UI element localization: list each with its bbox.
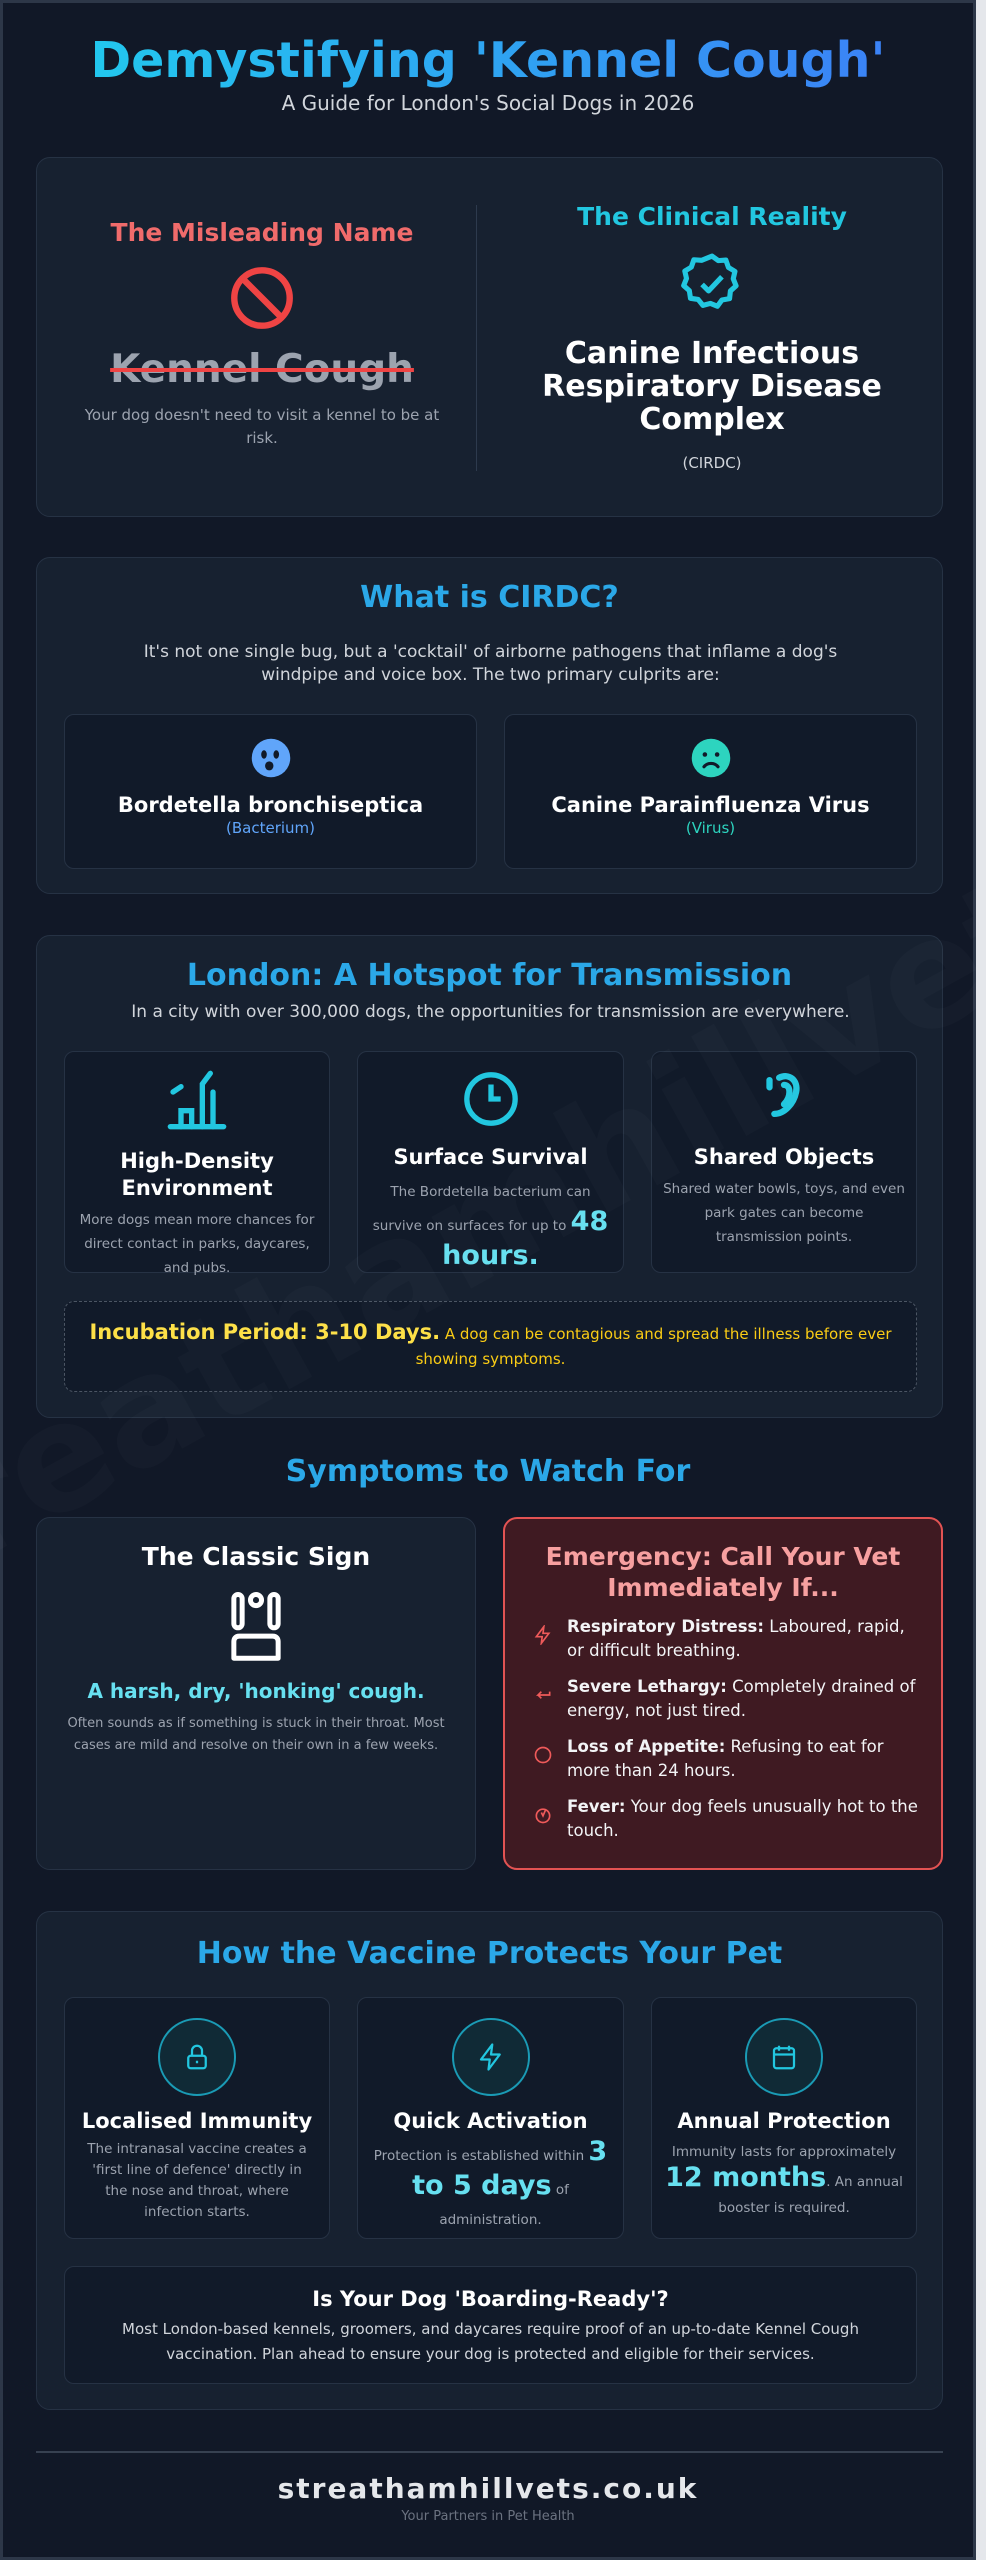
card: parainfluenza: [504, 714, 917, 869]
desc: Your dog doesn't need to visit a kennel to be at risk.: [85, 406, 439, 447]
title: [120, 1149, 274, 1200]
title: [546, 1542, 900, 1602]
icon: sad face: [692, 738, 730, 778]
title: Is Your Dog 'Boarding-Ready'?: [312, 2287, 669, 2311]
desc: The intranasal vaccine creates a 'first line of defence' directly in the nose and throat, where infection starts.: [87, 2141, 307, 2220]
type: (Bacterium): [226, 819, 315, 837]
text: Most London-based kennels, groomers, and daycares require proof of an up-to-date Kennel Cough vaccination. Plan ahead to ensure your dog is protected and eligible for their services.: [122, 2320, 859, 2363]
heading: misleading name: The Misleading Name: [111, 218, 413, 247]
panel: vaccine: [36, 1911, 943, 2410]
item: appetite: Loss of Appetite: Refusing to eat for more than 24 hours.: [567, 1737, 884, 1780]
title: Demystifying 'Kennel Cough': [90, 32, 886, 89]
card: surface survival: [357, 1051, 624, 1273]
desc: Immunity lasts for approximately 12 months. An annual booster is required.: [665, 2144, 903, 2216]
cyan highlight: A harsh, dry, 'honking' cough.: [87, 1679, 425, 1703]
desc: Often sounds as if something is stuck in their throat. Most cases are mild and resolve on their own in a few weeks.: [67, 1716, 445, 1753]
icon: face: [252, 738, 290, 778]
desc: Protection is established within 3 to 5 days of administration.: [374, 2136, 607, 2228]
desc: More dogs mean more chances for direct contact in parks, daycares, and pubs.: [80, 1212, 314, 1276]
card: annual protection: [651, 1997, 917, 2239]
card: localised immunity: [64, 1997, 330, 2239]
struck text: Kennel Cough: [110, 347, 414, 392]
item: respiratory: Respiratory Distress: Laboured, rapid, or difficult breathing.: [567, 1617, 905, 1660]
footer url: streathamhillvets.co.uk: [278, 2472, 698, 2505]
subtitle: A Guide for London's Social Dogs in 2026: [282, 91, 694, 115]
title: High-Density: [120, 1149, 274, 1173]
subtext: In a city with over 300,000 dogs, the opportunities for transmission are everywhere.: [131, 1002, 850, 1022]
panel: name vs reality: [36, 157, 943, 517]
icon: hand swirl: [766, 1073, 800, 1117]
title: Localised Immunity: [82, 2109, 312, 2133]
clinical reality column: [542, 202, 882, 472]
acronym: (CIRDC): [682, 454, 742, 472]
heading: What is CIRDC?: [360, 580, 619, 615]
icon: badge check: [681, 254, 739, 309]
icon: lock: [158, 2018, 236, 2096]
type: (Virus): [686, 819, 735, 837]
title: Emergency: Call Your Vet: [546, 1542, 900, 1571]
footer tagline: Your Partners in Pet Health: [401, 2509, 575, 2524]
heading: London: A Hotspot for Transmission: [187, 958, 792, 993]
card: quick activation: [357, 1997, 624, 2239]
item: lethargy: Severe Lethargy: Completely drained of energy, not just tired.: [567, 1677, 915, 1720]
title: Quick Activation: [393, 2109, 588, 2133]
desc: Shared water bowls, toys, and even park gates can become transmission points.: [663, 1181, 905, 1245]
icon: bolt: [452, 2018, 530, 2096]
icon: calendar: [745, 2018, 823, 2096]
panel: classic sign: [36, 1517, 476, 1870]
item: fever: Fever: Your dog feels unusually hot to the touch.: [567, 1797, 918, 1840]
name: Bordetella bronchiseptica: [118, 793, 423, 817]
title: The Classic Sign: [142, 1542, 370, 1571]
card: density: [64, 1051, 330, 1273]
title: Shared Objects: [694, 1145, 874, 1169]
icon: dog/cough: [231, 1592, 281, 1661]
panel: what is CIRDC: [36, 557, 943, 894]
panel: London hotspot: [36, 935, 943, 1418]
icon: clock: [464, 1072, 518, 1126]
title: Environment: [121, 1176, 273, 1200]
heading: How the Vaccine Protects Your Pet: [197, 1936, 782, 1971]
card: bordetella: [64, 714, 477, 869]
icon: buildings: [168, 1070, 226, 1130]
title: Surface Survival: [393, 1145, 588, 1169]
title: Immediately If...: [607, 1573, 839, 1602]
intro text: It's not one single bug, but a 'cocktail' of airborne pathogens that inflame a dog's windpipe and voice box. The two primary culprits are:: [144, 642, 837, 685]
heading: clinical reality: The Clinical Reality: [577, 202, 847, 231]
card: shared objects: [651, 1051, 917, 1273]
desc: The Bordetella bacterium can survive on surfaces for up to 48 hours.: [373, 1184, 608, 1271]
title: Annual Protection: [677, 2109, 891, 2133]
icon: prohibited: [231, 267, 293, 329]
heading: symptoms: Symptoms to Watch For: [286, 1454, 690, 1489]
full name: Canine Infectious Respiratory Disease Complex: [542, 336, 882, 437]
misleading name column: [84, 218, 439, 447]
name: Canine Parainfluenza Virus: [551, 793, 870, 817]
callout: incubation: [64, 1301, 917, 1392]
callout: incubation: Incubation Period: 3-10 Days. A dog can be contagious and spread the illness before ever showing symptoms.: [89, 1320, 892, 1368]
callout: boarding ready: [64, 2266, 917, 2384]
footer: [278, 2472, 698, 2524]
panel: emergency: [503, 1517, 943, 1870]
